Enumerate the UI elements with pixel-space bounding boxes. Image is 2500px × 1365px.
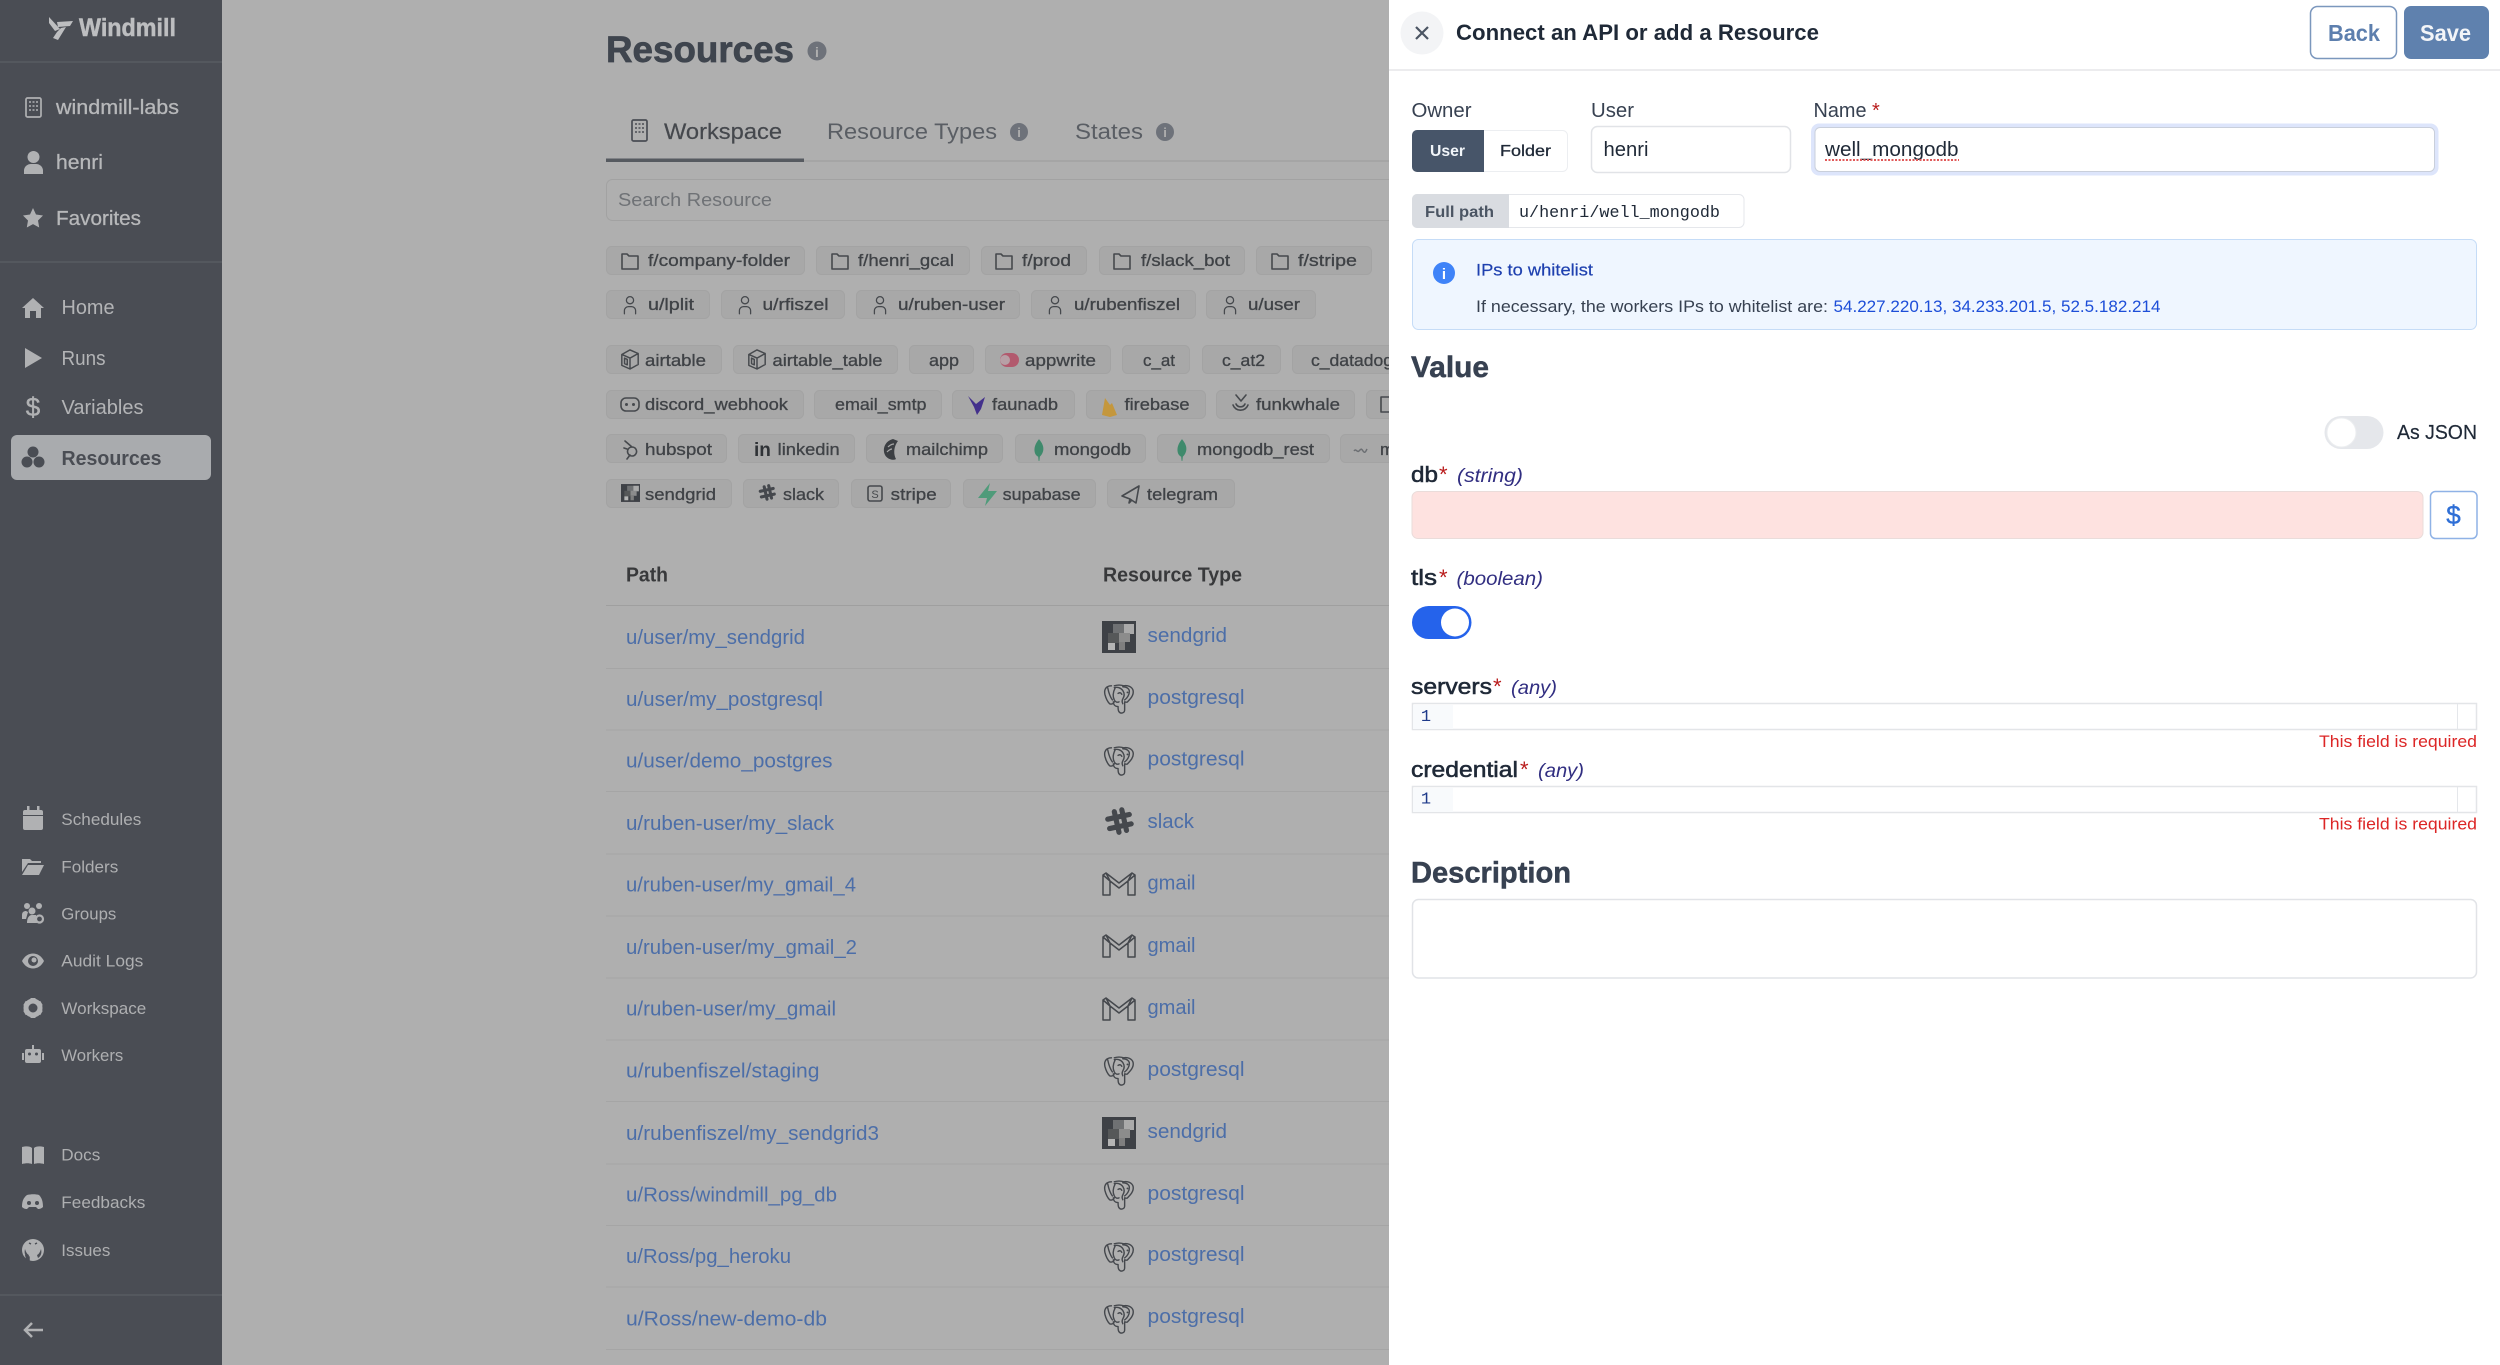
nav item: Runs: Runs — [62, 348, 106, 370]
logo: Windmill: Windmill — [79, 14, 176, 42]
nav item: Home — [22, 297, 114, 319]
chip: supabase — [964, 480, 1096, 508]
chip: f/henri_gcal: f/henri_gcal — [858, 251, 954, 270]
chip: u/ruben-user — [856, 290, 1020, 318]
chip: airtable — [606, 346, 722, 374]
row: u/Ross/new-demo-db: u/Ross/new-demo-db — [626, 1308, 827, 1330]
chip: c_at — [1122, 346, 1190, 374]
field: User — [1591, 100, 1790, 172]
row: u/ruben-user/my_gmail — [626, 997, 1196, 1020]
field: Name: * — [1872, 100, 1880, 122]
chip: u/lplit — [606, 290, 710, 318]
field: db: * — [1439, 462, 1448, 487]
chip: f/company-folder — [606, 246, 804, 274]
chip: appwrite: appwrite — [1025, 351, 1096, 370]
filter chips: resource types row 4 — [606, 480, 1234, 508]
tab: Resource Types: i — [1017, 125, 1021, 140]
menu item: Favorites: Favorites — [56, 208, 141, 230]
nav item: Runs — [25, 348, 106, 370]
chip: email_smtp: email_smtp — [835, 395, 926, 414]
heading: Value: Value — [1411, 351, 1489, 384]
toggle: As JSON — [2324, 416, 2477, 449]
tab: Resource Types: Resource Types — [827, 119, 997, 144]
row: u/user/my_sendgrid: u/user/my_sendgrid — [626, 627, 805, 649]
row: u/ruben-user/my_gmail_2 — [626, 935, 1196, 959]
nav item: Resources (active): Resources — [62, 448, 162, 470]
chip: funkwhale — [1216, 390, 1354, 418]
chip: u/ruben-user: u/ruben-user — [898, 295, 1005, 314]
row: u/rubenfiszel/my_sendgrid3: u/rubenfiszel/my_sendgrid3 — [626, 1123, 879, 1145]
textarea: description — [1412, 900, 2476, 978]
callout: IPs to whitelist — [1412, 240, 2476, 330]
chip: telegram: telegram — [1147, 485, 1218, 504]
field: Owner: User — [1430, 143, 1465, 160]
row: u/rubenfiszel/staging: postgresql — [1148, 1059, 1244, 1081]
chip: sendgrid — [606, 480, 732, 508]
chip: mailchimp — [866, 434, 1002, 462]
table: resources — [606, 564, 1396, 1350]
chip: stripe — [852, 480, 950, 508]
field: Name — [1813, 100, 2436, 174]
row: u/Ross/pg_heroku: u/Ross/pg_heroku — [626, 1246, 791, 1268]
tab: States — [1075, 119, 1174, 144]
row: u/ruben-user/my_slack: slack — [1148, 811, 1195, 833]
button: Back — [2310, 6, 2396, 58]
icon: info: i — [1442, 266, 1446, 283]
chip: app — [910, 346, 974, 374]
chip: supabase: supabase — [1003, 485, 1081, 504]
field: Name: well_mongodb — [1824, 139, 1958, 161]
row: u/Ross/new-demo-db: postgresql — [1148, 1306, 1244, 1328]
row: u/user/demo_postgres — [626, 747, 1244, 775]
nav item: Folders — [22, 858, 118, 876]
field: servers: * — [1493, 674, 1502, 699]
row: u/user/demo_postgres: u/user/demo_postgres — [626, 750, 832, 772]
field: Owner: Folder — [1500, 143, 1552, 160]
row: u/Ross/pg_heroku — [626, 1243, 1244, 1271]
filter chips: resource types row 2 — [606, 390, 1406, 418]
nav item: Issues — [22, 1239, 110, 1261]
nav item: Workers: Workers — [61, 1046, 123, 1065]
row: u/user/my_sendgrid: sendgrid — [1148, 625, 1227, 647]
chip: u/rubenfiszel: u/rubenfiszel — [1074, 295, 1180, 314]
filter chips: resource types row 3 — [606, 434, 1410, 462]
nav item: Docs — [22, 1146, 100, 1164]
chip: linkedin: linkedin — [778, 440, 840, 459]
title: Connect an API or add a Resource — [1456, 20, 1819, 45]
chip: app: app — [929, 351, 959, 370]
background: dimmed resources page — [222, 0, 1392, 1365]
row: u/Ross/windmill_pg_db: u/Ross/windmill_pg_db — [626, 1184, 837, 1206]
row: u/ruben-user/my_gmail: gmail — [1148, 997, 1196, 1019]
table header: Path — [626, 564, 668, 586]
row: u/ruben-user/my_gmail_4 — [626, 872, 1196, 896]
field: servers: servers — [1411, 674, 1492, 699]
menu item: Favorites — [23, 208, 141, 230]
chip: hubspot — [606, 434, 726, 462]
field: db: db — [1411, 462, 1438, 487]
button: Save: Save — [2420, 20, 2471, 46]
row: u/rubenfiszel/staging: u/rubenfiszel/staging — [626, 1060, 820, 1082]
field: credential: credential — [1411, 757, 1518, 782]
field: tls: tls — [1411, 565, 1437, 590]
chip: u/rfiszel: u/rfiszel — [762, 295, 828, 314]
chip: faunadb — [952, 390, 1074, 418]
chip: u/user — [1206, 290, 1316, 318]
chip: c_at2: c_at2 — [1222, 351, 1265, 370]
field: Full path: u/henri/well_mongodb — [1519, 204, 1720, 223]
button: close — [1400, 12, 1444, 54]
row: u/ruben-user/my_gmail: u/ruben-user/my_gmail — [626, 998, 836, 1020]
callout: IPs to whitelist: If necessary, the workers IPs to whitelist are: — [1476, 297, 1828, 316]
nav item: Feedbacks — [22, 1193, 145, 1212]
heading: Resources: Resources — [606, 29, 794, 70]
error: credential required: This field is required — [2319, 814, 2477, 834]
nav item: Schedules: Schedules — [61, 810, 141, 829]
chip: f/henri_gcal — [816, 246, 970, 274]
field: db — [1411, 462, 2477, 538]
nav item: Folders: Folders — [61, 858, 118, 876]
row: u/rubenfiszel/my_sendgrid3: sendgrid — [1148, 1121, 1227, 1143]
field: credential: * — [1520, 757, 1529, 782]
chip: u/rubenfiszel — [1032, 290, 1196, 318]
toggle: As JSON: As JSON — [2397, 422, 2477, 444]
field: Name: Name — [1814, 100, 1866, 122]
row: u/Ross/windmill_pg_db — [626, 1181, 1244, 1209]
nav item: Workspace: Workspace — [61, 999, 146, 1018]
chip: appwrite — [986, 346, 1110, 374]
field: servers — [1411, 674, 2476, 730]
chip: f/company-folder: f/company-folder — [648, 251, 790, 270]
chip: f/prod — [982, 246, 1086, 274]
chip: c_datadog — [1292, 346, 1408, 374]
field: tls — [1411, 565, 1543, 639]
field: tls: * — [1439, 565, 1448, 590]
nav item: Feedbacks: Feedbacks — [61, 1193, 145, 1212]
field: User: henri — [1604, 139, 1648, 161]
chip: airtable: airtable — [645, 351, 706, 370]
icon: info — [1433, 262, 1455, 284]
nav item: Workers — [22, 1045, 123, 1065]
chip: f/slack_bot: f/slack_bot — [1141, 251, 1230, 270]
chip: stripe: S — [871, 489, 879, 501]
chip: u/user: u/user — [1248, 295, 1300, 314]
table header — [626, 564, 1242, 586]
nav item: Home: Home — [62, 297, 114, 319]
table header: Resource Type — [1103, 564, 1242, 586]
chip: clipped next — [1366, 390, 1406, 418]
chip: faunadb: faunadb — [992, 395, 1058, 414]
panel: sidebar — [0, 0, 222, 1365]
field: Owner: Owner — [1412, 100, 1472, 122]
field: credential: 1 — [1421, 790, 1431, 810]
row: u/user/my_postgresql — [626, 685, 1244, 713]
row: u/Ross/new-demo-db — [626, 1305, 1244, 1333]
nav item: Variables: Variables — [62, 397, 144, 419]
chip: c_at2 — [1202, 346, 1280, 374]
chip: firebase: firebase — [1124, 395, 1190, 414]
nav item: Groups: Groups — [61, 904, 116, 924]
chip: mailchimp: mailchimp — [906, 440, 988, 459]
search box — [606, 180, 1406, 220]
field: credential: (any) — [1538, 761, 1584, 782]
chip: clipped m — [1340, 434, 1410, 462]
field: credential — [1411, 757, 2476, 812]
nav item: Audit Logs — [22, 952, 143, 970]
row: u/rubenfiszel/staging — [626, 1057, 1244, 1085]
chip: f/slack_bot — [1100, 246, 1244, 274]
callout: IPs to whitelist: IPs to whitelist — [1476, 260, 1593, 280]
heading: Resources: i — [815, 44, 819, 60]
tab: States: i — [1163, 125, 1167, 140]
button: Save — [2404, 6, 2489, 59]
field: servers: 1 — [1421, 708, 1431, 727]
button: variable $: $ — [2446, 500, 2461, 530]
chip: clipped m: m — [1380, 440, 1394, 459]
tabs — [606, 119, 1392, 162]
icon: collapse arrow — [25, 1323, 43, 1337]
row: u/Ross/windmill_pg_db: postgresql — [1148, 1183, 1244, 1205]
chip: u/lplit: u/lplit — [648, 295, 694, 314]
menu item: henri — [24, 151, 103, 174]
nav item: Schedules — [23, 806, 141, 830]
chip: discord_webhook — [606, 390, 804, 418]
row: u/ruben-user/my_gmail_2: u/ruben-user/my_gmail_2 — [626, 937, 857, 959]
chip: mongodb — [1016, 434, 1146, 462]
row: u/ruben-user/my_gmail_4: u/ruben-user/my_gmail_4 — [626, 874, 856, 896]
chip: airtable_table: airtable_table — [772, 351, 882, 370]
row: u/ruben-user/my_gmail_2: gmail — [1148, 935, 1196, 957]
button: variable $ — [2430, 492, 2477, 538]
filter chips: resource types row 1 — [606, 346, 1408, 374]
tab: Workspace: Workspace — [664, 119, 782, 144]
field: Full path — [1412, 194, 1744, 228]
field: Full path: Full path — [1425, 204, 1494, 221]
panel: drawer — [1389, 0, 2500, 1365]
drawer header — [1389, 6, 2500, 71]
field: tls: (boolean) — [1456, 569, 1543, 590]
field: Owner — [1412, 100, 1568, 172]
chip: telegram — [1108, 480, 1234, 508]
chip: f/prod: f/prod — [1022, 251, 1071, 270]
row: u/ruben-user/my_slack — [626, 810, 1195, 835]
chip: f/stripe: f/stripe — [1298, 251, 1357, 270]
chip: linkedin: in — [754, 440, 771, 461]
chip: stripe: stripe — [891, 485, 937, 504]
heading: Description: Description — [1411, 856, 1571, 890]
chip: mongodb_rest: mongodb_rest — [1197, 440, 1314, 459]
row: u/ruben-user/my_slack: u/ruben-user/my_slack — [626, 813, 835, 835]
nav item: Variables: $ — [26, 392, 41, 422]
row: u/user/my_sendgrid — [626, 621, 1227, 653]
chip: email_smtp — [814, 390, 942, 418]
row: u/Ross/pg_heroku: postgresql — [1148, 1244, 1244, 1266]
chip: funkwhale: funkwhale — [1256, 395, 1340, 414]
nav item: Groups — [22, 903, 116, 924]
nav item: Resources (active) — [11, 435, 211, 480]
chip: c_at: c_at — [1143, 351, 1175, 370]
row: u/rubenfiszel/my_sendgrid3 — [626, 1117, 1227, 1149]
chip: discord_webhook: discord_webhook — [645, 395, 789, 414]
search box: Search Resource — [618, 190, 772, 210]
chip: slack — [744, 480, 838, 508]
field: db: (string) — [1457, 466, 1523, 487]
error: servers required: This field is required — [2319, 732, 2477, 751]
chip: sendgrid: sendgrid — [645, 485, 716, 504]
chip: slack: slack — [783, 485, 825, 504]
chip: u/rfiszel — [722, 290, 844, 318]
tab: States: States — [1075, 119, 1143, 144]
menu item: henri: henri — [56, 152, 103, 174]
nav item: Variables — [26, 392, 144, 422]
chip: f/stripe — [1256, 246, 1372, 274]
row: u/ruben-user/my_gmail_4: gmail — [1148, 872, 1196, 894]
chip: c_datadog: c_datadog — [1311, 351, 1393, 370]
button: Back: Back — [2328, 20, 2380, 46]
filter chips: folders — [606, 246, 1372, 274]
row: u/user/my_postgresql: u/user/my_postgresql — [626, 689, 823, 711]
row: u/user/my_postgresql: postgresql — [1148, 687, 1244, 709]
row: u/user/demo_postgres: postgresql — [1148, 748, 1244, 770]
nav item: Docs: Docs — [61, 1146, 100, 1164]
chip: linkedin — [738, 434, 854, 462]
callout: IPs to whitelist: 54.227.220.13, 34.233.201.5, 52.5.182.214 — [1834, 297, 2160, 316]
nav item: Audit Logs: Audit Logs — [61, 952, 143, 970]
menu item: windmill-labs: windmill-labs — [55, 97, 179, 119]
filter chips: users — [606, 290, 1316, 318]
field: User: User — [1591, 100, 1634, 122]
chip: firebase — [1086, 390, 1206, 418]
chip: hubspot: hubspot — [645, 440, 712, 459]
field: servers: (any) — [1511, 678, 1557, 699]
chip: mongodb: mongodb — [1054, 440, 1131, 459]
chip: mongodb_rest — [1158, 434, 1330, 462]
nav item: Issues: Issues — [61, 1241, 110, 1260]
chip: airtable_table — [734, 346, 898, 374]
nav item: Workspace — [24, 998, 146, 1018]
